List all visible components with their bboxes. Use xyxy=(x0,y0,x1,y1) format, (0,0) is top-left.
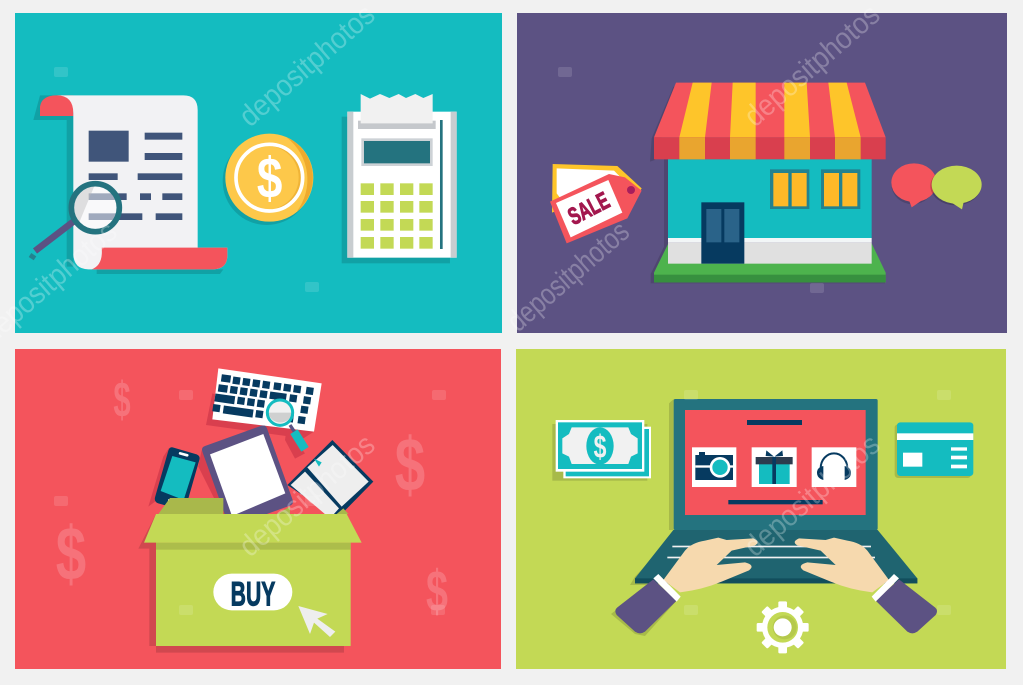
icons: faint dollar signs xyxy=(56,371,448,624)
icon: dollar coin xyxy=(223,134,313,225)
icon: gear xyxy=(757,601,809,653)
icon: magnifying glass xyxy=(30,184,119,258)
button: BUY xyxy=(213,574,292,613)
icon: laptop xyxy=(630,399,917,585)
icon: left hand xyxy=(611,538,758,636)
icons: faint dollar signs: $ xyxy=(113,371,131,428)
watermark: depositphotos xyxy=(0,0,886,563)
panel: shop (purple) xyxy=(517,13,1007,333)
icon: banknotes: $ xyxy=(594,429,607,464)
panel: buy (red) xyxy=(15,349,501,669)
icon: sale tag xyxy=(550,164,642,243)
watermark: depositphotos: depositphotos xyxy=(501,215,636,338)
icon: camera xyxy=(692,447,736,487)
icon: calculator with receipt xyxy=(342,94,457,263)
icon: headphones xyxy=(812,447,856,487)
icon: right hand xyxy=(795,538,937,633)
icon: sale tag: SALE xyxy=(564,187,614,231)
icon: speech bubbles xyxy=(891,163,982,209)
icons: faint dollar signs: $ xyxy=(395,423,425,508)
icon: credit card xyxy=(895,422,973,478)
icon: open book xyxy=(287,440,373,518)
icons: faint dollar signs: $ xyxy=(426,558,448,624)
watermark: depositphotos: depositphotos xyxy=(738,428,886,563)
icon: tablet xyxy=(198,425,293,526)
icon: keyboard xyxy=(206,368,322,459)
icons: faint dollar signs: $ xyxy=(56,512,86,597)
panel: billing (teal) xyxy=(15,13,502,333)
icon: banknotes xyxy=(552,420,651,481)
watermark: camera marks xyxy=(54,67,951,615)
icon: cursor arrow xyxy=(298,606,335,637)
watermark: depositphotos: depositphotos xyxy=(233,428,381,563)
icon: storefront xyxy=(650,83,886,283)
icon: dollar coin: $ xyxy=(257,147,283,211)
panel: online store (green) xyxy=(516,349,1006,669)
icon: smartphone xyxy=(148,447,200,510)
icon: gift xyxy=(752,447,797,487)
button: BUY: BUY xyxy=(231,575,275,613)
icon: paper scroll xyxy=(33,95,227,274)
icon: cardboard box xyxy=(138,498,362,653)
